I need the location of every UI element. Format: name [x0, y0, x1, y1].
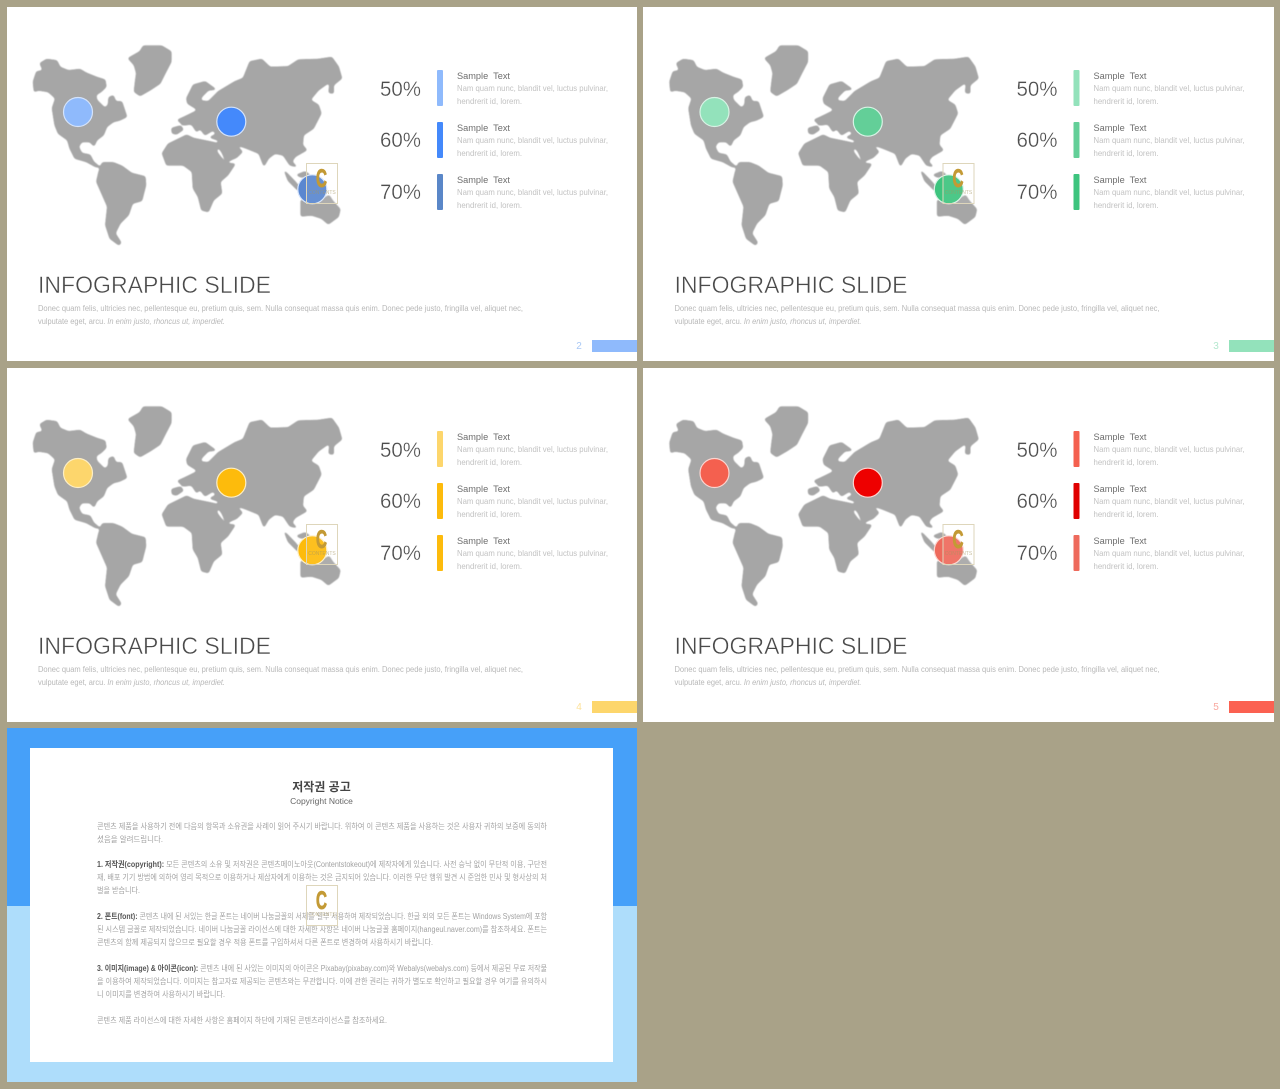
description: [674, 304, 1160, 326]
stat: 60%: 60%: [380, 490, 421, 513]
description: Donec quam felis, ultricies nec, pellentesque eu, pretium quis, sem. Nulla consequat massa quis enim. Donec pede justo, fringilla vel, aliquet nec,: [674, 304, 1160, 313]
description: Donec quam felis, ultricies nec, pellentesque eu, pretium quis, sem. Nulla consequat massa quis enim. Donec pede justo, fringilla vel, aliquet nec,: [674, 665, 1160, 674]
description: vulputate eget, arcu. In enim justo, rhoncus ut, imperdiet.: [38, 678, 225, 687]
stat: 50%: hendrerit id, lorem.: [1094, 458, 1158, 467]
title: INFOGRAPHIC SLIDE: [674, 272, 908, 299]
stat: 50%: 50%: [1016, 78, 1058, 101]
watermark: C: [316, 887, 327, 915]
watermark: CONTENTS: [308, 912, 336, 918]
section 3: [97, 963, 547, 999]
stat: 60%: Nam quam nunc, blandit vel, luctus pulvinar,: [1094, 136, 1244, 145]
section 1: 벌을 받습니다.: [97, 885, 140, 895]
stat: 50%: 50%: [380, 439, 421, 462]
stat: 50%: 50%: [380, 78, 421, 101]
section 1: [97, 859, 547, 895]
stat: 70%: hendrerit id, lorem.: [457, 201, 522, 210]
stat: 50%: Nam quam nunc, blandit vel, luctus pulvinar,: [1094, 445, 1244, 454]
panel: red slide: [643, 368, 1274, 722]
stat: 50%: Nam quam nunc, blandit vel, luctus pulvinar,: [1094, 84, 1244, 93]
stat: 70%: [1016, 174, 1244, 210]
stat: 60%: [1016, 483, 1244, 519]
stat: 60%: Sample Text: [1094, 484, 1147, 494]
section 3: 을 이용하여 제작되었습니다. 이미지는 참고자료 제공되는 콘텐츠와는 무관합니다. 이에 관한 권리는 귀하가 별도로 확인하고 필요할 경우 여기를 유의하시: [97, 976, 547, 986]
stat: 50%: Sample Text: [1094, 71, 1147, 81]
stat: 70%: [380, 535, 608, 571]
page number tab: 4: [576, 702, 582, 713]
page number tab: 5: [1213, 702, 1219, 713]
description: Donec quam felis, ultricies nec, pellentesque eu, pretium quis, sem. Nulla consequat massa quis enim. Donec pede justo, fringilla vel, aliquet nec,: [38, 665, 523, 674]
panel: blue slide: [7, 7, 637, 361]
stat: 50%: [1016, 431, 1244, 467]
panel: yellow slide: [7, 368, 637, 722]
map markers: [64, 98, 327, 204]
stat: 70%: 70%: [1016, 181, 1058, 204]
stat: 70%: Nam quam nunc, blandit vel, luctus pulvinar,: [457, 549, 608, 558]
stat: 70%: [380, 174, 608, 210]
page number tab: [1213, 340, 1274, 352]
title: INFOGRAPHIC SLIDE: [38, 633, 271, 660]
stat: 50%: [380, 431, 608, 467]
stat: 60%: 60%: [380, 129, 421, 152]
stat: 60%: [380, 122, 608, 158]
stat: 60%: Sample Text: [457, 484, 510, 494]
watermark: [306, 164, 338, 204]
description: Donec quam felis, ultricies nec, pellentesque eu, pretium quis, sem. Nulla consequat massa quis enim. Donec pede justo, fringilla vel, aliquet nec,: [38, 304, 523, 313]
watermark: C: [952, 165, 964, 193]
stat: 50%: 50%: [1016, 439, 1058, 462]
section 3: 니 이미지를 변경하여 사용하시기 바랍니다.: [97, 989, 225, 999]
page number tab: 2: [576, 341, 582, 352]
stat: 50%: [380, 70, 608, 106]
panel: green slide: [643, 7, 1274, 361]
section 2: [97, 911, 547, 947]
stat: 60%: 60%: [1016, 129, 1058, 152]
stat: 50%: Nam quam nunc, blandit vel, luctus pulvinar,: [457, 84, 608, 93]
stat: 60%: 60%: [1016, 490, 1058, 513]
stat: 70%: [1016, 535, 1244, 571]
world map: [33, 46, 342, 245]
watermark: CONTENTS: [945, 190, 973, 196]
stat: 50%: Sample Text: [457, 71, 510, 81]
stat: 60%: hendrerit id, lorem.: [1094, 149, 1158, 158]
stat: 60%: [1016, 122, 1244, 158]
stat: 70%: hendrerit id, lorem.: [1094, 201, 1158, 210]
page number tab: [576, 340, 637, 352]
watermark: C: [952, 526, 964, 554]
subheading: Copyright Notice: [290, 796, 353, 806]
world map: [670, 46, 978, 245]
panel: copyright notice: [7, 728, 637, 1082]
section 3: 3. 이미지(image) & 아이콘(icon): 콘텐츠 내에 된 사있는 이미지의 아이콘은 Pixabay(pixabay.com)와 Webalys(webalys.com) 등에서 제공된 무료 저작물: [97, 963, 547, 973]
map markers: [700, 458, 963, 565]
watermark: C: [316, 165, 327, 193]
world map: [670, 407, 978, 606]
closing text: 콘텐츠 제품 라이선스에 대한 자세한 사항은 홈페이지 하단에 기재된 콘텐츠라이선스를 참조하세요.: [97, 1015, 387, 1025]
stat: 60%: hendrerit id, lorem.: [1094, 510, 1158, 519]
page number tab: 3: [1213, 341, 1219, 352]
stat: 50%: Nam quam nunc, blandit vel, luctus pulvinar,: [457, 445, 608, 454]
stat: 70%: Nam quam nunc, blandit vel, luctus pulvinar,: [1094, 549, 1244, 558]
stat: 70%: Sample Text: [457, 175, 510, 185]
stat: 70%: Sample Text: [457, 536, 510, 546]
description: vulputate eget, arcu. In enim justo, rhoncus ut, imperdiet.: [38, 317, 225, 326]
stat: 70%: hendrerit id, lorem.: [457, 562, 522, 571]
stat: 70%: 70%: [380, 542, 421, 565]
description: [674, 665, 1160, 687]
stat: 50%: Sample Text: [457, 432, 510, 442]
watermark: [306, 524, 338, 564]
description: vulputate eget, arcu. In enim justo, rhoncus ut, imperdiet.: [674, 678, 862, 687]
stat: 70%: Sample Text: [1094, 536, 1147, 546]
description: [38, 665, 523, 687]
section 2: 콘텐츠의 함께 제공되지 않으므로 필요할 경우 적용 폰트를 구입하셔서 다른 폰트로 변경하여 사용하시기 바랍니다.: [97, 937, 433, 947]
stat: 60%: Nam quam nunc, blandit vel, luctus pulvinar,: [457, 497, 608, 506]
watermark: [943, 524, 974, 564]
page number tab: [1213, 701, 1274, 713]
map markers: [64, 458, 327, 565]
stat: 60%: Nam quam nunc, blandit vel, luctus pulvinar,: [457, 136, 608, 145]
stat: 50%: hendrerit id, lorem.: [457, 97, 522, 106]
intro text: 콘텐츠 제품을 사용하기 전에 다음의 항목과 소유권을 사례이 읽어 주시기 바랍니다. 위하여 이 콘텐츠 제품을 사용하는 것은 사용자 귀하의 보증에 동의하: [97, 821, 547, 831]
stat: 60%: hendrerit id, lorem.: [457, 149, 522, 158]
stat: 70%: hendrerit id, lorem.: [1094, 562, 1158, 571]
stat: 70%: Sample Text: [1094, 175, 1147, 185]
stat: 70%: 70%: [1016, 542, 1058, 565]
intro text: 셨음을 알려드립니다.: [97, 834, 163, 844]
stat: 70%: Nam quam nunc, blandit vel, luctus pulvinar,: [1094, 188, 1244, 197]
description: vulputate eget, arcu. In enim justo, rhoncus ut, imperdiet.: [674, 317, 862, 326]
stat: 60%: Sample Text: [1094, 123, 1147, 133]
watermark: CONTENTS: [308, 190, 336, 196]
description: [38, 304, 523, 326]
stat: 50%: [1016, 70, 1244, 106]
stat: 60%: Sample Text: [457, 123, 510, 133]
watermark: [943, 164, 974, 204]
stat: 50%: hendrerit id, lorem.: [1094, 97, 1158, 106]
heading: 저작권 공고: [292, 779, 351, 794]
title: INFOGRAPHIC SLIDE: [674, 633, 908, 660]
watermark: CONTENTS: [945, 551, 973, 557]
stat: 50%: Sample Text: [1094, 432, 1147, 442]
section 1: 재, 배포 기기 방법에 의하여 영리 목적으로 이용하거나 제삼자에게 이용하는 것은 금지되어 있습니다. 이러한 무단 행위 발견 시 준엄한 민사 및 형사상의 처: [97, 872, 547, 882]
map markers: [700, 98, 963, 204]
section 2: 2. 폰트(font): 콘텐츠 내에 된 서있는 한글 폰트는 네이버 나눔글꼴의 서체를 일부 사용하여 제작되었습니다. 한글 외의 모든 폰트는 Windows System에 포함: [97, 911, 547, 921]
stat: 70%: Nam quam nunc, blandit vel, luctus pulvinar,: [457, 188, 608, 197]
section 2: 된 시스템 글꼴로 제작되었습니다. 네이버 나눔글꼴 라이선스에 대한 자세한 사항은 네이버 나눔글꼴 홈페이지(hangeul.naver.com)를 참조하세요. 폰트는: [97, 924, 547, 934]
watermark: [306, 886, 338, 926]
page number tab: [576, 701, 637, 713]
world map: [33, 407, 342, 606]
watermark: C: [316, 526, 327, 554]
stat: 60%: hendrerit id, lorem.: [457, 510, 522, 519]
stat: 50%: hendrerit id, lorem.: [457, 458, 522, 467]
section 1: 1. 저작권(copyright): 모든 콘텐츠의 소유 및 저작권은 콘텐츠메이노아웃(Contentstokeout)에 제작자에게 있습니다. 사전 승낙 없이 무단적 이용, 구단전: [97, 859, 547, 869]
intro text: [97, 821, 547, 844]
stat: 70%: 70%: [380, 181, 421, 204]
stat: 60%: Nam quam nunc, blandit vel, luctus pulvinar,: [1094, 497, 1244, 506]
watermark: CONTENTS: [308, 551, 336, 557]
title: INFOGRAPHIC SLIDE: [38, 272, 271, 299]
stat: 60%: [380, 483, 608, 519]
